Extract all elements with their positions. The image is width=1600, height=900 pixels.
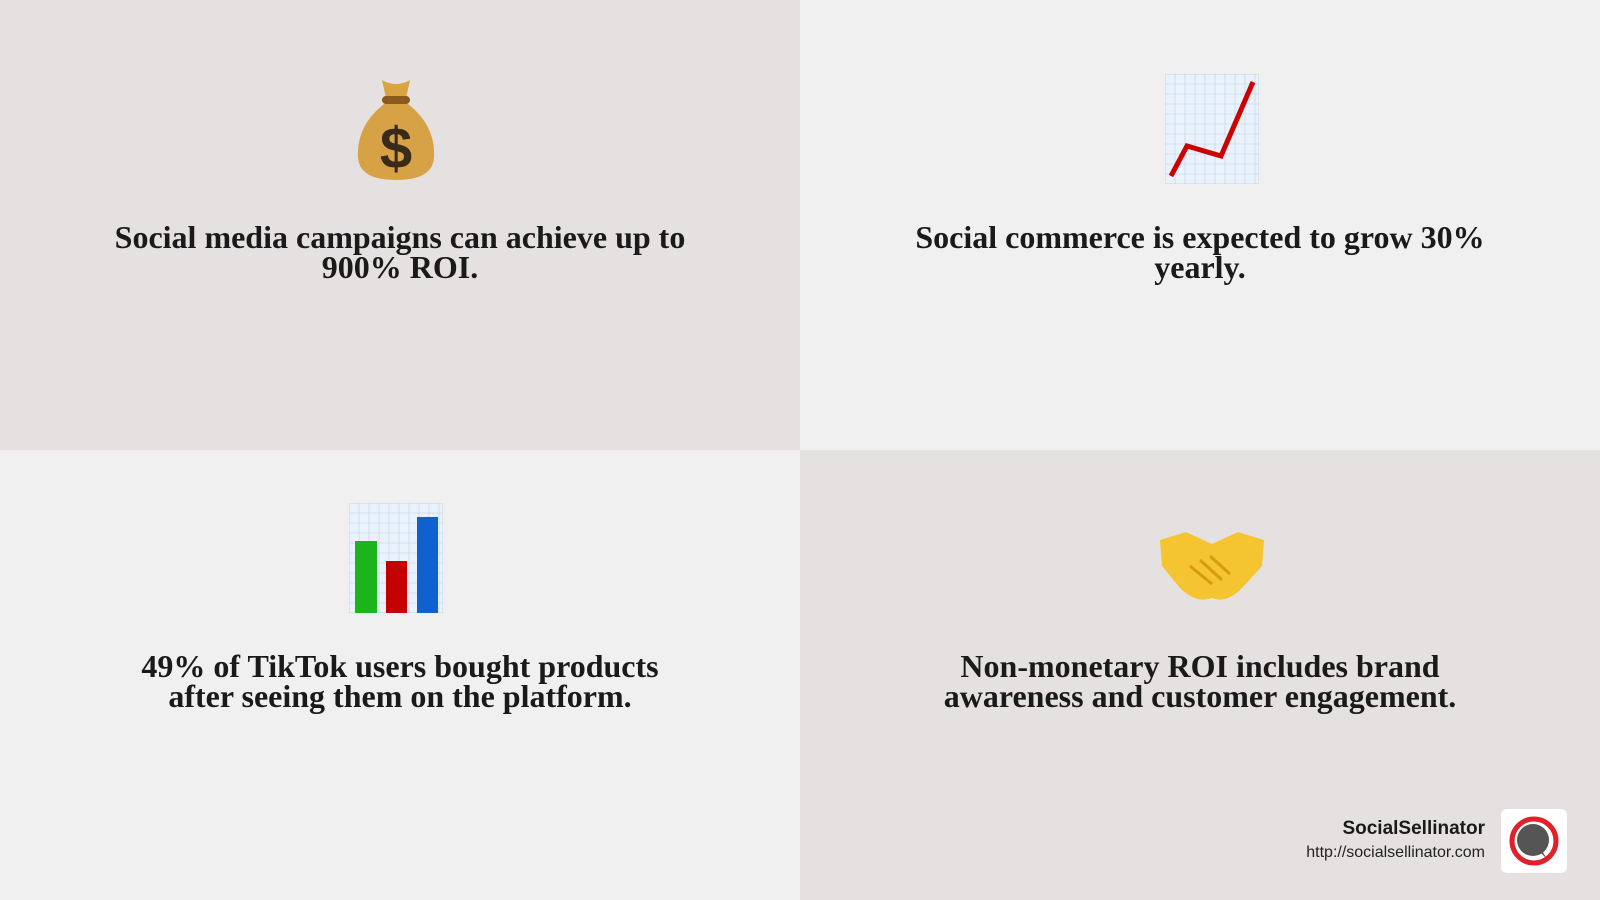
text: ROI stat bbox=[115, 219, 685, 285]
icon: bar chart bbox=[349, 503, 443, 613]
panel: TikTok bbox=[0, 450, 800, 900]
text: TikTok stat: 49% of TikTok users bought products bbox=[141, 648, 659, 684]
icon: handshake bbox=[1160, 532, 1264, 600]
text: commerce stat: yearly. bbox=[1154, 249, 1246, 285]
text: ROI stat: 900% ROI. bbox=[322, 249, 478, 285]
text: non-monetary stat bbox=[944, 648, 1456, 714]
brand text: SocialSellinator bbox=[1342, 818, 1485, 839]
text: TikTok stat: after seeing them on the platform. bbox=[168, 678, 632, 714]
panel: ROI bbox=[0, 0, 800, 450]
brand text bbox=[1306, 818, 1485, 861]
icon: chart increasing bbox=[1165, 74, 1259, 184]
brand: SocialSellinator bbox=[1306, 809, 1567, 873]
text: non-monetary stat: Non-monetary ROI includes brand bbox=[960, 648, 1440, 684]
panel: social commerce bbox=[800, 0, 1600, 450]
panel: non-monetary bbox=[800, 450, 1600, 900]
icon: logo bbox=[1501, 809, 1567, 873]
text: ROI stat: Social media campaigns can achieve up to bbox=[115, 219, 685, 255]
text: commerce stat: Social commerce is expected to grow 30% bbox=[915, 219, 1485, 255]
text: TikTok stat bbox=[141, 648, 659, 714]
text: non-monetary stat: awareness and customer engagement. bbox=[944, 678, 1456, 714]
brand text: http://socialsellinator.com bbox=[1306, 844, 1485, 861]
icon: money bag: $ bbox=[380, 116, 412, 181]
icon: money bag bbox=[358, 80, 434, 181]
text: commerce stat bbox=[915, 219, 1485, 285]
